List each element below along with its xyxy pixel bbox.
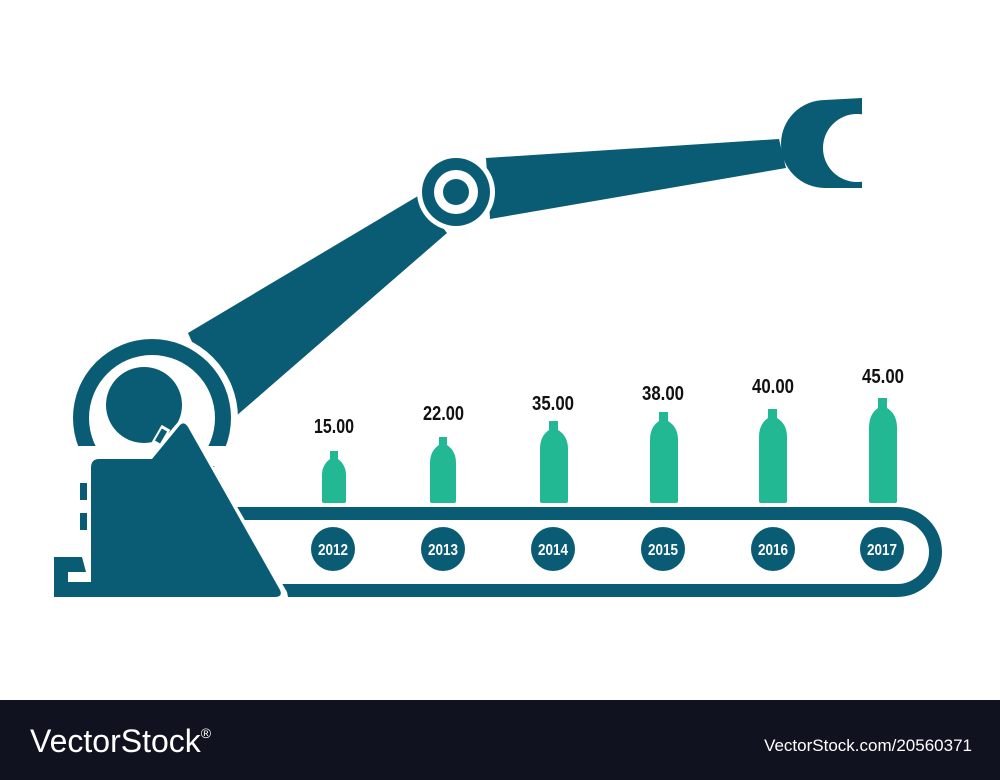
year markers: 2016 bbox=[758, 542, 788, 559]
robot base bbox=[54, 419, 289, 602]
year markers: 2013 bbox=[428, 542, 458, 559]
footer bar: ® bbox=[201, 725, 212, 741]
year markers bbox=[311, 527, 904, 571]
upper arm bbox=[486, 139, 786, 219]
year markers: 2014 bbox=[538, 542, 568, 559]
footer bar: VectorStock bbox=[30, 723, 201, 759]
year markers: 2017 bbox=[867, 542, 897, 559]
bottle 2012 bbox=[314, 416, 354, 503]
lower arm bbox=[188, 196, 447, 423]
footer bar: VectorStock.com/20560371 bbox=[764, 736, 972, 755]
gripper bbox=[781, 90, 891, 200]
shoulder ring bbox=[60, 332, 238, 504]
bottle 2014: 35.00 bbox=[532, 393, 574, 415]
conveyor belt bbox=[200, 507, 942, 597]
year markers: 2015 bbox=[648, 542, 678, 559]
bottle 2017: 45.00 bbox=[862, 366, 904, 388]
elbow joint bbox=[417, 153, 495, 231]
year markers: 2012 bbox=[318, 542, 348, 559]
bottle 2013 bbox=[423, 403, 464, 503]
bottle chart bbox=[314, 366, 904, 503]
bottle 2016 bbox=[752, 376, 794, 503]
bottle 2013: 22.00 bbox=[423, 403, 464, 425]
bottle 2012: 15.00 bbox=[314, 416, 354, 438]
footer bar bbox=[0, 700, 1000, 780]
bottle 2015 bbox=[642, 383, 684, 503]
bottle 2016: 40.00 bbox=[752, 376, 794, 398]
bottle 2015: 38.00 bbox=[642, 383, 684, 405]
bottle 2017 bbox=[862, 366, 904, 503]
bottle 2014 bbox=[532, 393, 574, 503]
